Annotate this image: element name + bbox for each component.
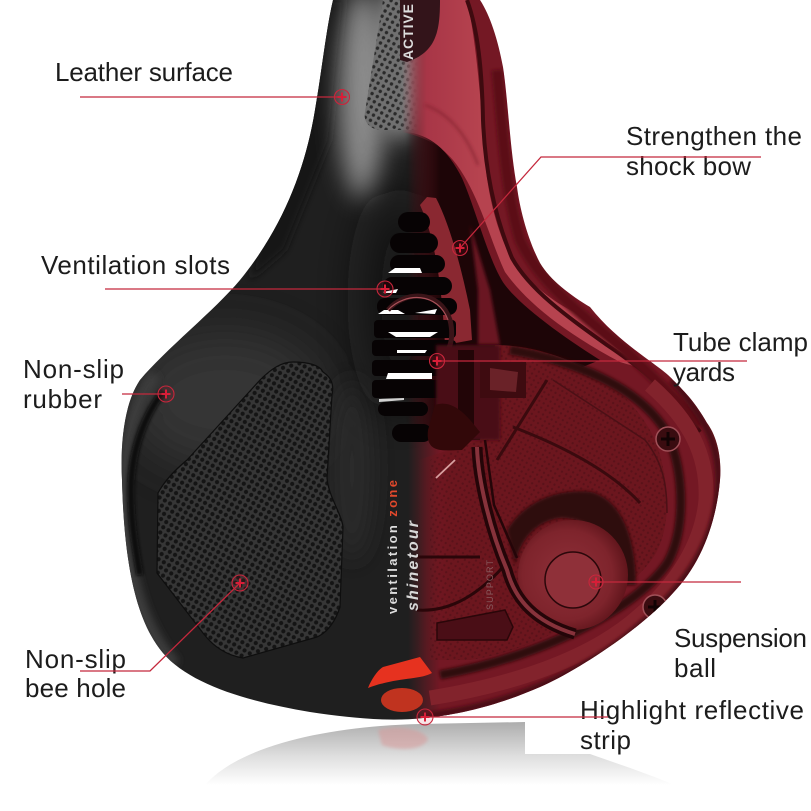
callout: tube clamp yards: yards bbox=[673, 357, 735, 387]
callout: non-slip rubber: Non-slip bbox=[23, 354, 124, 384]
callout: suspension ball: ball bbox=[674, 653, 716, 683]
arm second leg bbox=[485, 440, 517, 558]
bowl shadow edge bbox=[440, 350, 681, 675]
non-slip bee hole pad bbox=[157, 362, 343, 658]
light through slots bbox=[378, 268, 438, 402]
red taillight bbox=[368, 657, 432, 688]
ball spring crescent bbox=[507, 491, 636, 585]
callout: non-slip bee hole: bee hole bbox=[25, 673, 126, 703]
upper left body light bbox=[125, 330, 325, 470]
neck shadow into vents bbox=[360, 177, 411, 360]
nose crease bbox=[425, 105, 478, 165]
reflective oval bbox=[381, 688, 423, 712]
outer rim dark bbox=[497, 70, 702, 425]
floor reflection bbox=[200, 722, 680, 788]
callout: non-slip bee hole: Non-slip bbox=[25, 644, 126, 674]
light red nose face bbox=[402, 0, 640, 368]
shinetour logo: shinetour bbox=[405, 520, 422, 611]
callout: non-slip rubber: rubber bbox=[23, 384, 102, 414]
suspension arm bbox=[477, 447, 575, 634]
callout: ventilation slots bbox=[41, 250, 393, 297]
callout: ventilation slots: Ventilation slots bbox=[41, 250, 230, 280]
saddle body base bbox=[110, 0, 450, 730]
textured nose patch bbox=[364, 0, 415, 130]
callout: leather surface: Leather surface bbox=[55, 57, 233, 87]
ventilation slots bbox=[372, 212, 457, 442]
left rim groove bbox=[131, 392, 163, 575]
callout: strengthen the shock bow: Strengthen the bbox=[626, 121, 802, 151]
right of pad light bbox=[334, 407, 370, 544]
suspension ball bbox=[518, 520, 628, 630]
frame ribs bbox=[497, 380, 640, 503]
callout: tube clamp yards: Tube clamp bbox=[673, 327, 808, 357]
bowl outer rim bbox=[430, 385, 706, 698]
support mark: SUPPORT bbox=[485, 560, 495, 610]
callout: highlight reflective strip: strip bbox=[580, 725, 631, 755]
callout: non-slip bee hole bbox=[25, 575, 248, 703]
ball cap bbox=[545, 552, 601, 608]
bowl interior bbox=[480, 345, 576, 440]
callout: highlight reflective strip bbox=[417, 695, 804, 755]
outer edge dark bbox=[425, 380, 719, 716]
callout: leather surface bbox=[55, 57, 350, 104]
ventilation zone logo: ventilation zone bbox=[385, 480, 400, 614]
reflection of taillight bbox=[378, 728, 428, 749]
neck second highlight bbox=[375, 0, 425, 140]
tube clamp and cable bbox=[388, 296, 526, 478]
neck highlight bbox=[338, 0, 386, 200]
bowl texture bbox=[430, 345, 667, 660]
ACTIVE badge bbox=[400, 0, 440, 62]
inner cavity bbox=[405, 132, 600, 440]
leather neck dark edge bbox=[250, 0, 345, 280]
red side base bbox=[408, 0, 730, 730]
shock bow bracket bbox=[420, 197, 472, 345]
cavity red smear bbox=[470, 225, 500, 345]
screw lower bbox=[643, 595, 667, 619]
callout: suspension ball: Suspension bbox=[674, 623, 807, 653]
callout: highlight reflective strip: Highlight reflective bbox=[580, 695, 804, 725]
callout: tube clamp yards bbox=[430, 327, 808, 387]
callout: non-slip rubber bbox=[23, 354, 174, 414]
lower panel bbox=[437, 610, 513, 640]
lower frame bbox=[417, 557, 503, 610]
saddle bbox=[110, 0, 730, 730]
callout: strengthen the shock bow bbox=[452, 121, 802, 256]
screw upper bbox=[656, 427, 680, 451]
ACTIVE logo: ACTIVE bbox=[400, 4, 416, 60]
outer left rim light bbox=[124, 375, 175, 665]
dark channel in rim bbox=[467, 0, 700, 432]
panel outline bbox=[553, 380, 667, 513]
callout: strengthen the shock bow: shock bow bbox=[626, 151, 751, 181]
callout: suspension ball bbox=[589, 575, 807, 683]
